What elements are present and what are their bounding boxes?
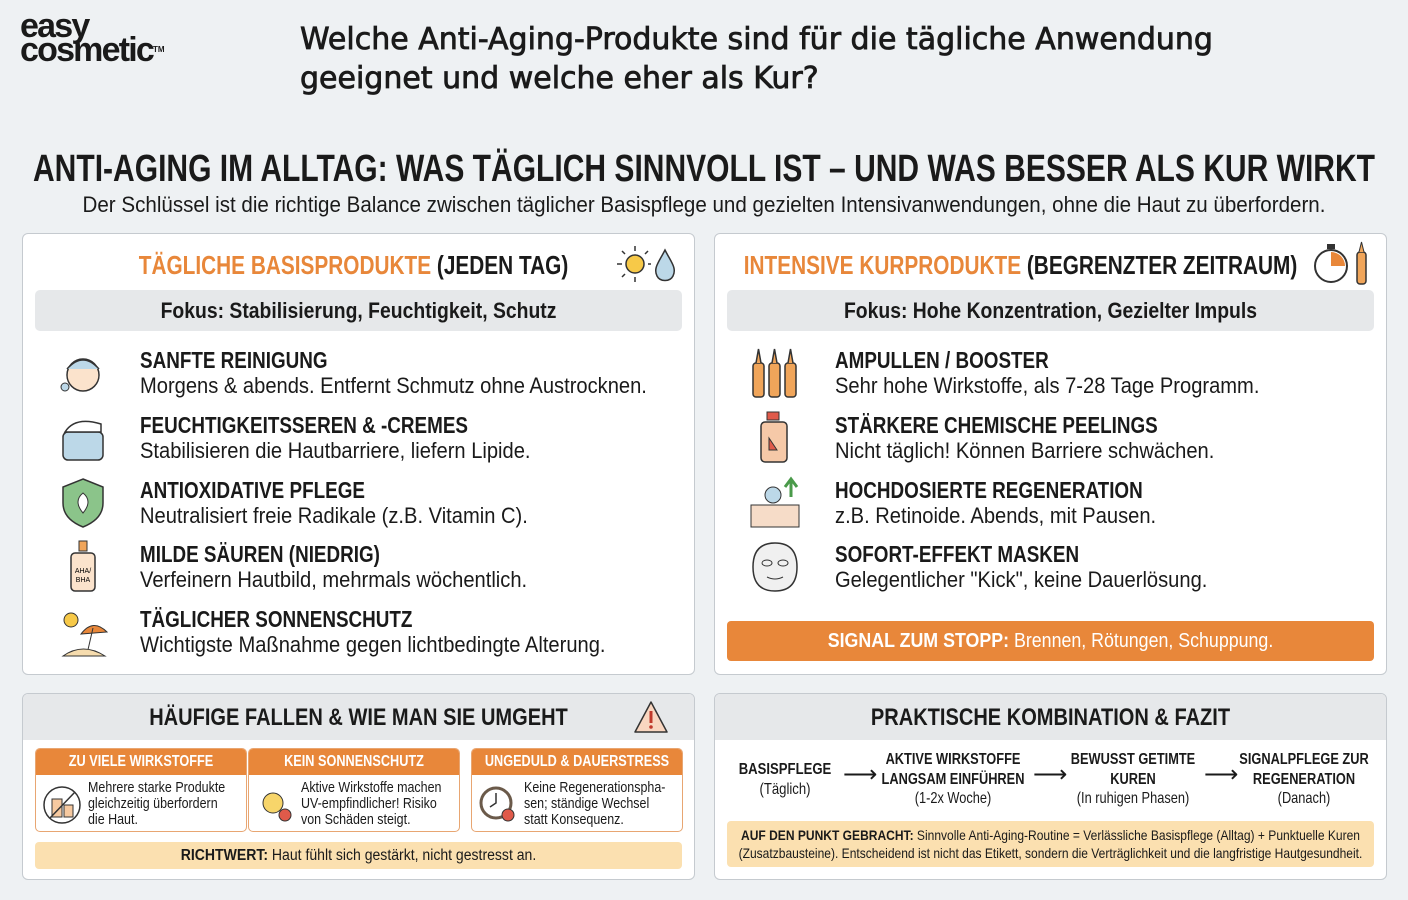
arrow: ⟶: [843, 761, 877, 788]
item: sheet masks: [752, 541, 1207, 592]
item: sunscreen: TÄGLICHER SONNENSCHUTZ: [140, 606, 412, 632]
item: moisture serums: FEUCHTIGKEITSSEREN & -CREMES: [140, 412, 468, 438]
item: sheet masks: Gelegentlicher "Kick", keine Dauerlösung.: [835, 567, 1207, 592]
card: too many actives: gleichzeitig überfordern: [88, 796, 218, 812]
step: timed treatments: BEWUSST GETIMTE: [1071, 751, 1195, 768]
item: sheet masks: SOFORT-EFFEKT MASKEN: [835, 541, 1079, 567]
step: timed treatments: [1071, 751, 1195, 807]
item: chemical peels: [760, 412, 1214, 463]
card: no sunscreen: UV-empfindlicher! Risiko: [301, 796, 437, 812]
card: impatience: Keine Regenerationspha-: [524, 780, 665, 796]
item: high-dose regeneration: z.B. Retinoide. Abends, mit Pausen.: [835, 503, 1156, 528]
callout: guideline: [35, 842, 682, 869]
card: impatience: [471, 748, 683, 832]
step: introduce actives: (1-2x Woche): [915, 790, 991, 807]
card: too many actives: ZU VIELE WIRKSTOFFE: [69, 753, 213, 770]
callout: summary: AUF DEN PUNKT GEBRACHT: Sinnvolle Anti-Aging-Routine = Verlässliche Basispflege (Alltag) + Punktuelle Kuren: [741, 827, 1360, 843]
card: impatience: statt Konsequenz.: [524, 812, 624, 828]
card: no sunscreen: von Schäden steigt.: [301, 812, 411, 828]
logo: easy: [20, 7, 88, 45]
logo: cosmeticTM: [20, 31, 165, 69]
header: [715, 694, 1386, 740]
main title: ANTI-AGING IM ALLTAG: WAS TÄGLICH SINNVOLL IST – UND WAS BESSER ALS KUR WIRKT: [33, 148, 1375, 190]
card: too many actives: die Haut.: [88, 812, 138, 828]
header: PRAKTISCHE KOMBINATION & FAZIT: [871, 704, 1230, 731]
item: ampoules: [752, 347, 1259, 398]
step: timed treatments: KUREN: [1110, 770, 1156, 788]
step: basic care: [739, 761, 831, 798]
focus bar: Fokus: Stabilisierung, Feuchtigkeit, Schutz: [161, 298, 556, 323]
question heading: Welche Anti-Aging-Produkte sind für die tägliche Anwendung: [300, 22, 1213, 57]
item: antioxidant: [62, 477, 528, 528]
item: chemical peels: Nicht täglich! Können Barriere schwächen.: [835, 438, 1214, 463]
focus bar: Fokus: Hohe Konzentration, Gezielter Impuls: [844, 298, 1257, 323]
item: mild acids: AHA/: [75, 568, 91, 575]
item: antioxidant: ANTIOXIDATIVE PFLEGE: [140, 477, 365, 503]
question heading: [300, 22, 1213, 96]
focus bar: [35, 290, 682, 331]
question heading: geeignet und welche eher als Kur?: [300, 61, 819, 96]
icon: stopwatch and ampoule: [1314, 242, 1367, 285]
item: cleansing: [60, 347, 647, 398]
flow diagram: [739, 751, 1369, 807]
focus bar: [727, 290, 1374, 331]
card: impatience: UNGEDULD & DAUERSTRESS: [485, 753, 669, 770]
item: moisture serums: Stabilisieren die Hautbarriere, liefern Lipide.: [140, 438, 531, 463]
step: basic care: BASISPFLEGE: [739, 761, 831, 778]
arrow: ⟶: [1204, 761, 1238, 788]
icon: warning: [634, 701, 668, 733]
step: introduce actives: LANGSAM EINFÜHREN: [882, 770, 1024, 788]
item: mild acids: MILDE SÄUREN (NIEDRIG): [140, 541, 380, 567]
panel: common pitfalls: [22, 693, 695, 880]
item: cleansing: SANFTE REINIGUNG: [140, 347, 328, 373]
item: sunscreen: [62, 606, 606, 657]
logo: [20, 7, 165, 69]
header: HÄUFIGE FALLEN & WIE MAN SIE UMGEHT: [149, 704, 568, 731]
card: no sunscreen: [248, 748, 460, 832]
panel: practical combination: [714, 693, 1387, 880]
item: mild acids: [70, 540, 527, 592]
callout: summary: [727, 821, 1374, 867]
item: mild acids: Verfeinern Hautbild, mehrmals wöchentlich.: [140, 567, 527, 592]
step: regeneration: REGENERATION: [1253, 770, 1355, 788]
step: timed treatments: (In ruhigen Phasen): [1077, 790, 1189, 807]
item: mild acids: BHA: [76, 577, 91, 584]
step: introduce actives: [882, 751, 1024, 807]
item: ampoules: Sehr hohe Wirkstoffe, als 7-28 Tage Programm.: [835, 373, 1259, 398]
item: antioxidant: Neutralisiert freie Radikale (z.B. Vitamin C).: [140, 503, 528, 528]
arrow: ⟶: [1033, 761, 1067, 788]
callout: guideline: RICHTWERT: Haut fühlt sich gestärkt, nicht gestresst an.: [181, 847, 536, 864]
item: high-dose regeneration: HOCHDOSIERTE REGENERATION: [835, 477, 1143, 503]
card: no sunscreen: Aktive Wirkstoffe machen: [301, 780, 441, 796]
item: sunscreen: Wichtigste Maßnahme gegen lichtbedingte Alterung.: [140, 632, 606, 657]
card: impatience: sen; ständige Wechsel: [524, 796, 649, 812]
item: high-dose regeneration: [750, 476, 1156, 528]
heading: TÄGLICHE BASISPRODUKTE (JEDEN TAG): [139, 250, 568, 280]
step: regeneration: [1239, 751, 1369, 807]
callout: stop signal: SIGNAL ZUM STOPP: Brennen, Rötungen, Schuppung.: [828, 630, 1273, 652]
panel: intensive treatment products: [714, 233, 1387, 675]
item: moisture serums: [62, 412, 531, 463]
subtitle: Der Schlüssel ist die richtige Balance zwischen täglicher Basispflege und gezielten Intensivanwendungen, ohne die Haut zu überfordern.: [83, 192, 1325, 217]
card: too many actives: [35, 748, 247, 832]
heading: INTENSIVE KURPRODUKTE (BEGRENZTER ZEITRAUM): [744, 250, 1297, 280]
item: ampoules: AMPULLEN / BOOSTER: [835, 347, 1049, 373]
callout: stop signal: [727, 621, 1374, 661]
step: introduce actives: AKTIVE WIRKSTOFFE: [886, 751, 1020, 768]
header: [23, 694, 694, 740]
icon: sun and drop: [617, 246, 675, 282]
panel: daily basic products: [22, 233, 695, 675]
step: basic care: (Täglich): [759, 780, 811, 798]
card: too many actives: Mehrere starke Produkte: [88, 780, 225, 796]
item: chemical peels: STÄRKERE CHEMISCHE PEELINGS: [835, 412, 1158, 438]
item: cleansing: Morgens & abends. Entfernt Schmutz ohne Austrocknen.: [140, 373, 647, 398]
callout: summary: (Zusatzbausteine). Entscheidend ist nicht das Etikett, sondern die Verträglichkeit und die langfristige Hautgesundheit.: [739, 845, 1362, 861]
card: no sunscreen: KEIN SONNENSCHUTZ: [284, 753, 424, 770]
step: regeneration: (Danach): [1278, 790, 1330, 807]
step: regeneration: SIGNALPFLEGE ZUR: [1239, 751, 1369, 768]
